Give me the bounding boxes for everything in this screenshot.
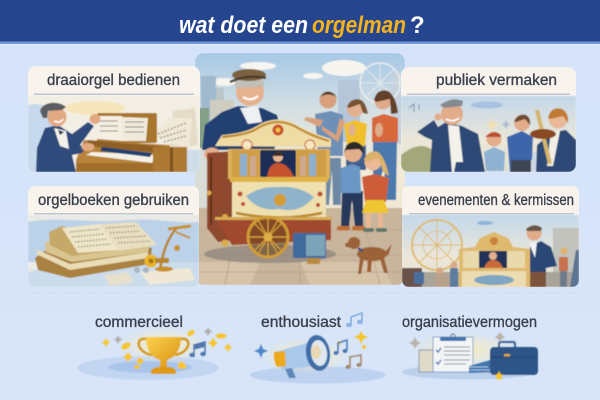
faint divider: [28, 292, 575, 294]
illustration: fair with organ: [402, 215, 579, 287]
family: woman in orange: [372, 90, 398, 200]
organ side: [207, 151, 233, 242]
small organ: [459, 232, 530, 287]
wheel: [248, 217, 288, 257]
illustration: organist at the organ: [28, 96, 200, 172]
organ base: [216, 219, 331, 245]
organ grinder: [202, 69, 281, 160]
family: boy: [337, 142, 365, 230]
bottom item: enthousiast: [250, 313, 386, 384]
heading: publiek vermaken: publiek vermaken: [436, 72, 557, 89]
family: woman in yellow: [344, 99, 368, 170]
woman right: [559, 248, 579, 287]
barrel organ: [206, 120, 332, 246]
organ facade: [228, 149, 330, 179]
family: father: [304, 92, 345, 205]
dog: [345, 237, 392, 274]
family: girl: [362, 151, 389, 232]
heading: enthousiast: enthousiast: [261, 314, 342, 331]
title: [179, 12, 425, 39]
bottom item: organisatievermogen: [402, 314, 538, 380]
entertainer: [417, 99, 485, 172]
panel: publiek vermaken: [401, 67, 576, 172]
panel: orgelboeken gebruiken: [28, 186, 199, 287]
icon: megaphone with notes: [250, 331, 386, 384]
icon: clipboard and suitcase: [402, 332, 538, 380]
ferris wheel: [412, 220, 462, 270]
panel: draaiorgel bedienen: [28, 66, 200, 172]
panel: central illustration of organ grinder: [195, 53, 406, 285]
organ: [76, 113, 187, 172]
boy with red cap: [484, 132, 505, 171]
title: ?: [410, 12, 425, 39]
title: wat doet een: [179, 12, 308, 39]
violinist: [530, 108, 576, 172]
papers: [104, 272, 134, 286]
icon: light blue note: [346, 313, 363, 327]
sheet music: [153, 108, 198, 150]
icon: trophy with coins: [77, 327, 232, 380]
brass mechanism: [134, 226, 191, 273]
heading: orgelboeken gebruiken: orgelboeken gebruiken: [38, 192, 189, 209]
clouds: [212, 60, 366, 86]
organ window with figure: [260, 150, 296, 177]
pavement: [195, 208, 405, 285]
ferris wheel: [360, 63, 400, 103]
book stack: [35, 222, 157, 278]
organ top: [215, 120, 331, 147]
illustration: entertaining the audience: [401, 96, 576, 172]
man: [526, 225, 557, 287]
organist: [36, 103, 100, 172]
buildings: [195, 72, 406, 210]
bottom item: commercieel: [77, 314, 232, 380]
crowd: [402, 262, 458, 287]
heading: organisatievermogen: organisatievermogen: [402, 314, 537, 331]
heading: commercieel: commercieel: [95, 314, 183, 331]
illustration: stack of organ books: [28, 215, 199, 287]
header banner: [0, 0, 600, 45]
heading: evenementen & kermissen: evenementen & kermissen: [418, 192, 574, 209]
panel: evenementen & kermissen: [402, 186, 579, 287]
blue box: [293, 233, 326, 264]
organ painted panel: [230, 177, 328, 182]
heading: draaiorgel bedienen: draaiorgel bedienen: [47, 72, 180, 89]
title: orgelman: [312, 12, 406, 39]
boy in blue: [507, 115, 533, 172]
